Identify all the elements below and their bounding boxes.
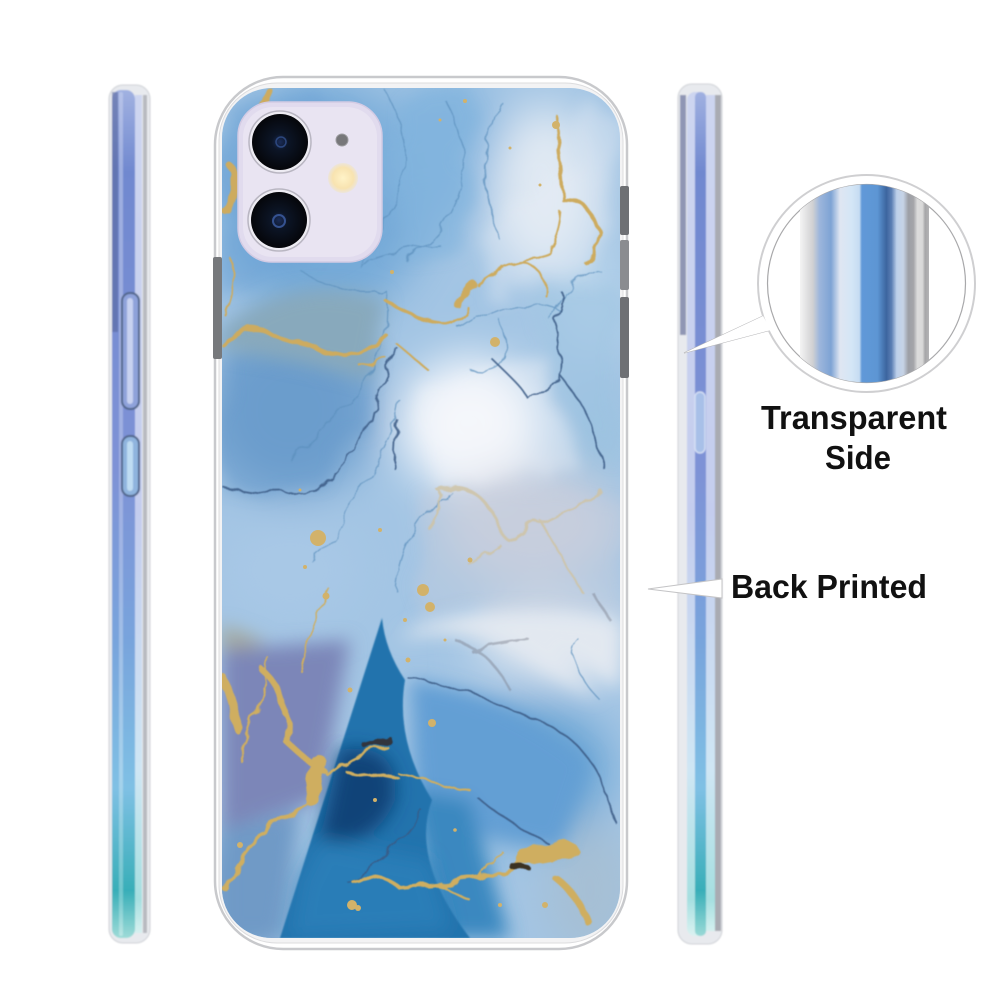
deep blue triangle: [280, 618, 470, 938]
marble print: [222, 88, 620, 938]
magnifier callout: transparent side: [684, 175, 975, 392]
soft marble washes: [222, 95, 620, 620]
label: Back Printed: Back Printed: [731, 568, 927, 605]
gold splatter: [237, 99, 560, 911]
right side button: [695, 392, 705, 453]
label: Transparent Side: [761, 399, 947, 476]
product illustration: [108, 76, 976, 950]
camera module: [238, 102, 382, 262]
upper lens: [249, 111, 311, 173]
lower lens: [248, 189, 310, 251]
side buttons: [213, 186, 629, 378]
pointer wedge: [684, 316, 771, 353]
clear case frame: [215, 77, 627, 949]
right side view of case: [678, 84, 722, 944]
ink contour lines: [290, 90, 600, 700]
microphone: [336, 134, 348, 146]
label: Transparent Side: Transparent: [761, 399, 947, 436]
phone case back: [200, 77, 635, 970]
label: Transparent Side: Side: [825, 439, 891, 476]
magnified stripes: [800, 184, 929, 383]
left side view of case: [109, 85, 150, 943]
flash: [328, 163, 358, 193]
left side buttons: [122, 293, 139, 496]
gold veins: [224, 92, 600, 922]
pointer: back printed: [648, 579, 722, 598]
